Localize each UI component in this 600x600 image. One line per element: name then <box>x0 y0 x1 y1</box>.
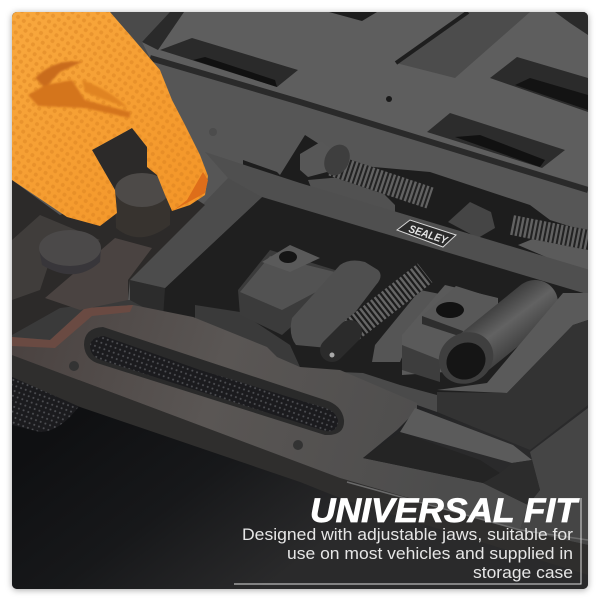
clamp block left <box>238 245 335 335</box>
floor blocks in cavity <box>195 305 437 412</box>
second bolt <box>512 225 588 240</box>
cylinder <box>429 303 535 394</box>
rounded block <box>291 261 381 348</box>
pin 2 <box>39 230 101 274</box>
pin 1 <box>115 173 170 237</box>
orange glove <box>12 12 208 226</box>
T nut block <box>402 285 498 382</box>
description text: use on most vehicles and supplied in <box>287 544 573 563</box>
corner rule <box>234 498 581 584</box>
nut <box>448 202 495 238</box>
floor <box>0 380 600 600</box>
title: UNIVERSAL FIT <box>310 492 580 530</box>
oval slotted recess <box>84 327 344 435</box>
inner cavity <box>130 197 600 410</box>
lower tray <box>12 305 588 575</box>
recessed pockets in upper tray <box>160 12 588 168</box>
bolt <box>300 140 430 198</box>
knurled foot <box>12 372 80 432</box>
third block <box>372 290 450 362</box>
description text: Designed with adjustable jaws, suitable for <box>242 525 573 544</box>
SEALEY badge <box>397 220 456 247</box>
right lower surface <box>520 408 588 545</box>
SEALEY badge: SEALEY <box>407 223 450 247</box>
palm folds <box>28 61 130 118</box>
description text <box>242 525 573 582</box>
front frame bar <box>205 152 600 298</box>
lower right raised pocket <box>363 408 540 505</box>
shadowed gap under glove and pin bed <box>12 128 205 335</box>
rivets <box>69 361 303 450</box>
right wedge block <box>437 293 588 450</box>
frame corner block <box>130 178 262 288</box>
description text: storage case <box>473 563 573 582</box>
tray ridge <box>150 58 588 190</box>
dark cavity with bolts <box>243 135 588 285</box>
upper tray surface <box>0 0 600 300</box>
threaded stud <box>330 273 425 358</box>
